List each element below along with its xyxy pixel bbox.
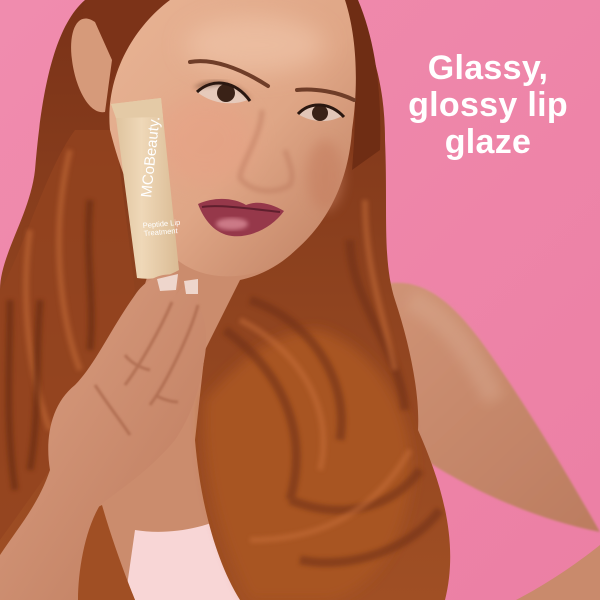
tube brand label: MCoBeauty. — [138, 116, 163, 198]
hand and forearm — [0, 274, 206, 600]
headline: Glassy, glossy lip glaze: glaze — [445, 123, 531, 161]
nose shadow — [240, 110, 292, 191]
ear — [71, 18, 112, 112]
finger creases — [95, 302, 198, 435]
headline: Glassy, glossy lip glaze: Glassy, — [428, 49, 548, 87]
long auburn hair — [0, 0, 450, 600]
lower hair strand beside forearm — [60, 505, 135, 600]
product tube — [111, 98, 181, 279]
left hair mass — [0, 0, 170, 600]
pale pink top — [125, 512, 265, 600]
shoulder and arm — [330, 283, 600, 600]
glossy lips — [198, 199, 284, 236]
right eye and brow — [297, 89, 354, 121]
neck and chest — [85, 240, 380, 600]
fingernails — [157, 274, 178, 291]
headline: Glassy, glossy lip glaze: glossy lip — [408, 86, 568, 124]
right hair mass — [195, 0, 450, 600]
tube product label: Peptide Lip — [142, 218, 181, 230]
headline: Glassy, glossy lip glaze — [408, 49, 568, 161]
left eye and brow — [190, 61, 268, 103]
product tube: Treatment — [143, 226, 179, 238]
face — [71, 0, 356, 276]
